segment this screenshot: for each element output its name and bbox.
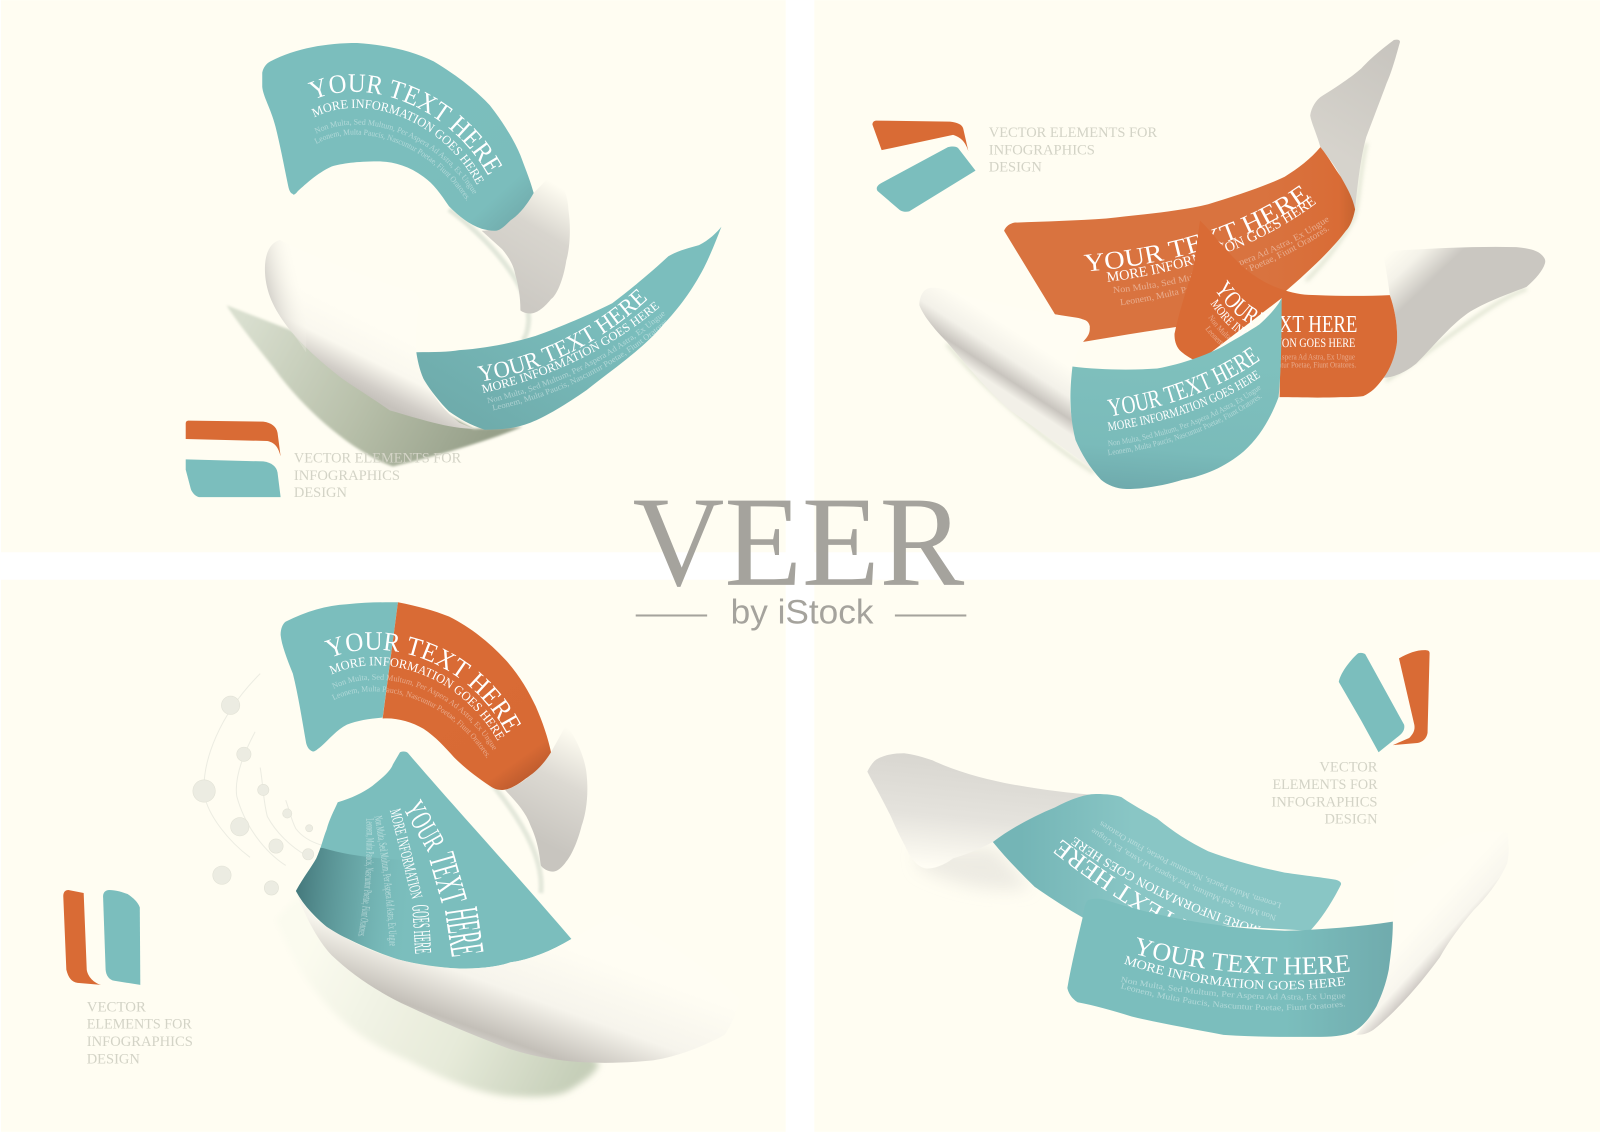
caption: DESIGN [294, 485, 347, 501]
ribbon text: Leonem, Multa Paucis, Nascuntur Poetae, Fiunt Oratores. [1108, 396, 1262, 456]
ribbon text: Leonem, Multa Paucis, Nascuntur Poetae, Fiunt Oratores. [314, 129, 468, 200]
caption: VECTOR ELEMENTS FOR [989, 125, 1158, 141]
panel: bottom-left ribbons [63, 602, 690, 1100]
ribbon text: TEXT [430, 850, 467, 904]
caption: INFOGRAPHICS [989, 142, 1095, 158]
ribbon text: YOUR [404, 798, 444, 853]
ribbon text: MORE INFORMATION GOES HERE [328, 656, 504, 740]
ribbon text: Leonem, Multa Paucis, Nascuntur Poetae, Fiunt Oratores. [1120, 228, 1330, 306]
ribbon text: Leonem, Multa Paucis, Nascuntur Poetae, Fiunt Oratores. [1205, 326, 1356, 369]
ribbon text: GOES HERE [412, 905, 432, 954]
ribbon text: YOUR TEXT HERE [1137, 937, 1350, 974]
ribbon text: MORE INFORMATION GOES HERE [481, 302, 660, 393]
logo icon [63, 890, 140, 985]
grey curl behind ribbon [505, 725, 587, 872]
byline: by iStock [731, 594, 874, 632]
soft edge shadows [947, 143, 1527, 473]
ribbon text: YOUR TEXT HERE [1216, 280, 1356, 332]
ribbon text: Non Multa, Sed Multum, Per Aspera Ad Astra, Ex Ungue [374, 815, 396, 946]
ribbon text: Non Multa, Sed Multum, Per Aspera Ad Astra, Ex Ungue [1108, 386, 1261, 446]
ribbon text: YOUR TEXT HERE [477, 288, 648, 381]
ribbon text: Non Multa, Sed Multum, Per Aspera Ad Astra, Ex Ungue [1120, 976, 1346, 1001]
caption [1271, 760, 1378, 828]
caption: VECTOR ELEMENTS FOR [294, 450, 462, 466]
teal top ribbon [262, 43, 534, 231]
ribbon text: MORE INFORMATION GOES HERE [1210, 298, 1355, 348]
ribbon text: YOUR TEXT HERE [308, 74, 502, 175]
ribbon text [1120, 937, 1350, 1012]
caption: DESIGN [989, 160, 1042, 176]
caption [294, 450, 462, 501]
orange half of top ribbon [383, 602, 551, 790]
grey curl behind top ribbon [482, 170, 570, 313]
upside-down ribbon text: MORE INFORMATION GOES HERE [1071, 836, 1261, 929]
teal triangle ribbon [286, 752, 571, 980]
upside-down ribbon text: Non Multa, Sed Multum, Per Aspera Ad Astra, Ex Ungue [1092, 828, 1276, 920]
ribbon text: MORE INFORMATION [390, 808, 422, 899]
logo icon [186, 421, 281, 497]
white right curl [1356, 831, 1509, 1035]
ribbon text: Leonem, Multa Paucis, Nascuntur Poetae, Fiunt Oratores. [1120, 983, 1345, 1012]
ribbon text: Leonem, Multa Paucis, Nascuntur Poetae, Fiunt Oratores. [332, 686, 489, 758]
grey back curl [867, 753, 1096, 869]
caption: INFOGRAPHICS [1271, 794, 1378, 810]
caption [87, 999, 193, 1067]
soft shadow crescent [449, 209, 529, 340]
orange large ribbon [1004, 147, 1355, 342]
watermark [633, 470, 966, 632]
panel: top-left ribbon [186, 43, 722, 501]
ribbon text: HERE [445, 906, 484, 957]
teal half of top ribbon [281, 602, 398, 751]
soft shadow crescent [449, 740, 541, 893]
ribbon text [1205, 280, 1356, 369]
orange small ribbon [1174, 221, 1397, 398]
caption: DESIGN [1324, 812, 1378, 828]
ribbon text: MORE INFORMATION GOES HERE [1106, 196, 1316, 282]
upside-down ribbon text: Leonem, Multa Paucis, Nascuntur Poetae, Fiunt Oratores. [1100, 822, 1282, 908]
logo icon [1339, 650, 1430, 752]
caption: ELEMENTS FOR [87, 1017, 192, 1033]
ribbon text [1106, 346, 1262, 456]
ribbon text: Non Multa, Sed Multum, Per Aspera Ad Astra, Ex Ungue [1113, 218, 1330, 293]
ribbon text: Leonem, Multa Paucis, Nascuntur Poetae, Fiunt Oratores. [358, 818, 374, 936]
ribbon text: MORE INFORMATION GOES HERE [311, 99, 484, 184]
ribbon text: YOUR TEXT HERE [1106, 346, 1260, 416]
ribbon text: Leonem, Multa Paucis, Nascuntur Poetae, Fiunt Oratores. [492, 320, 666, 410]
caption: VECTOR [1319, 760, 1378, 776]
caption: INFOGRAPHICS [294, 468, 400, 484]
green cast shadow [276, 898, 599, 1097]
panel: top-right ribbons [872, 40, 1546, 489]
ribbon text: YOUR TEXT HERE [1084, 185, 1310, 271]
ribbon text: Non Multa, Sed Multum, Per Aspera Ad Astra, Ex Ungue [1208, 314, 1355, 362]
ribbon text: Non Multa, Sed Multum, Per Aspera Ad Astra, Ex Ungue [332, 674, 496, 750]
caption: VECTOR [87, 999, 146, 1015]
teal front ribbon [1070, 298, 1282, 489]
caption: INFOGRAPHICS [87, 1034, 193, 1050]
caption [989, 125, 1158, 176]
teal lower ribbon [416, 227, 721, 430]
caption: ELEMENTS FOR [1272, 777, 1378, 793]
white curl left [919, 288, 1094, 471]
ribbon text: Non Multa, Sed Multum, Per Aspera Ad Astra, Ex Ungue [314, 119, 476, 194]
wordmark: VEER [633, 470, 965, 613]
ribbon text: MORE INFORMATION GOES HERE [1124, 956, 1346, 990]
logo icon [872, 121, 976, 212]
teal back ribbon [993, 794, 1341, 931]
ribbon text [1084, 185, 1330, 306]
upside-down ribbon text: YOUR TEXT HERE [1054, 840, 1187, 920]
ribbon text: YOUR TEXT HERE [324, 632, 521, 734]
ribbon text: MORE INFORMATION GOES HERE [1107, 370, 1260, 431]
teal front ribbon [1067, 899, 1393, 1037]
grey curl upper [1310, 40, 1400, 209]
dotted arcs [193, 674, 321, 895]
grey curl right [1384, 247, 1545, 378]
ribbon text: Non Multa, Sed Multum, Per Aspera Ad Astra, Ex Ungue [486, 312, 666, 404]
white lower curl [265, 240, 473, 429]
green cast shadow [227, 305, 522, 467]
soft shadow under curl [918, 847, 1031, 890]
caption: DESIGN [87, 1051, 140, 1067]
ribbon text [358, 798, 484, 957]
white large curl [296, 892, 740, 1063]
